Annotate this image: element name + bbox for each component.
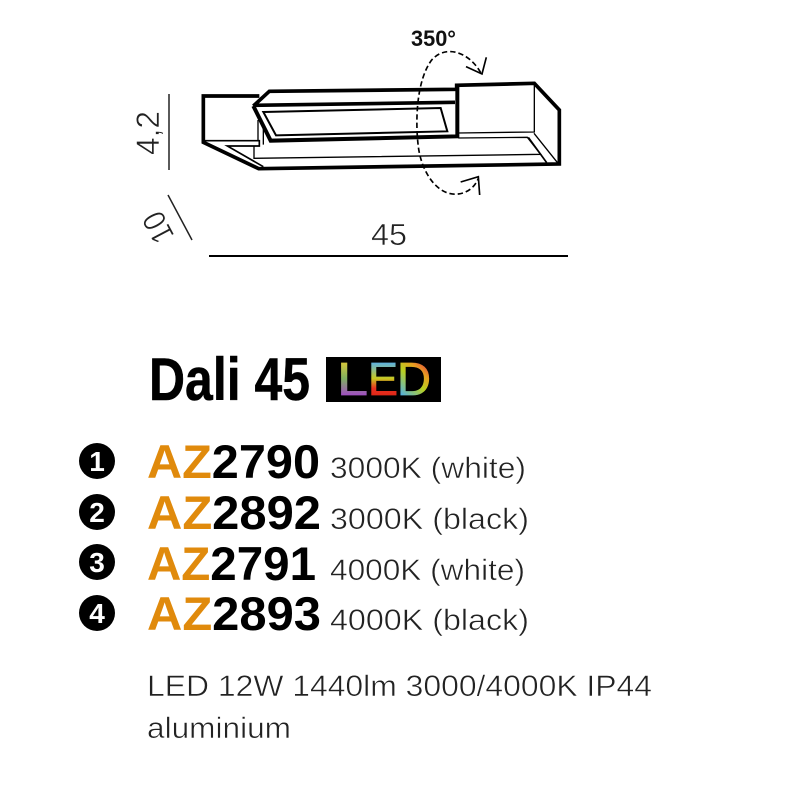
dimension: height xyxy=(130,94,169,170)
product row 1 xyxy=(79,435,526,488)
product row 4: 4000K (black) xyxy=(330,604,529,637)
dimension: height: 4,2 xyxy=(130,111,166,155)
product row 4: AZ2893 xyxy=(147,587,321,640)
product row 3 xyxy=(79,537,525,590)
dimension: depth: 10 xyxy=(135,205,181,250)
LED badge: L xyxy=(337,353,368,405)
product row 3: 3 xyxy=(89,547,105,578)
product row 4 xyxy=(79,587,529,640)
LED badge xyxy=(326,353,441,405)
product row 3: 4000K (white) xyxy=(330,554,525,587)
lamp body outline xyxy=(203,83,559,169)
LED badge: D xyxy=(397,353,431,405)
product row 2: AZ2892 xyxy=(147,486,321,539)
product row 1: AZ2790 xyxy=(147,435,320,488)
rotation arrow: dashed arc xyxy=(417,52,486,195)
dimension: depth xyxy=(135,195,192,250)
product row 3: AZ2791 xyxy=(147,537,316,590)
product row 2 xyxy=(79,486,529,539)
product row 1: 3000K (white) xyxy=(330,452,526,485)
specifications: aluminium xyxy=(147,712,291,745)
specifications xyxy=(147,670,652,745)
title: Dali 45 xyxy=(149,346,310,413)
rotation label: 350° xyxy=(411,26,456,51)
product row 4: 4 xyxy=(89,598,105,629)
LED badge: E xyxy=(368,353,398,405)
diagram: lamp technical drawing xyxy=(203,52,559,195)
dimension: width: 45 xyxy=(371,217,407,252)
product row 2: 3000K (black) xyxy=(330,503,529,536)
product row 1: 1 xyxy=(89,446,105,477)
product row 2: 2 xyxy=(89,497,105,528)
specifications: LED 12W 1440lm 3000/4000K IP44 xyxy=(147,670,652,703)
